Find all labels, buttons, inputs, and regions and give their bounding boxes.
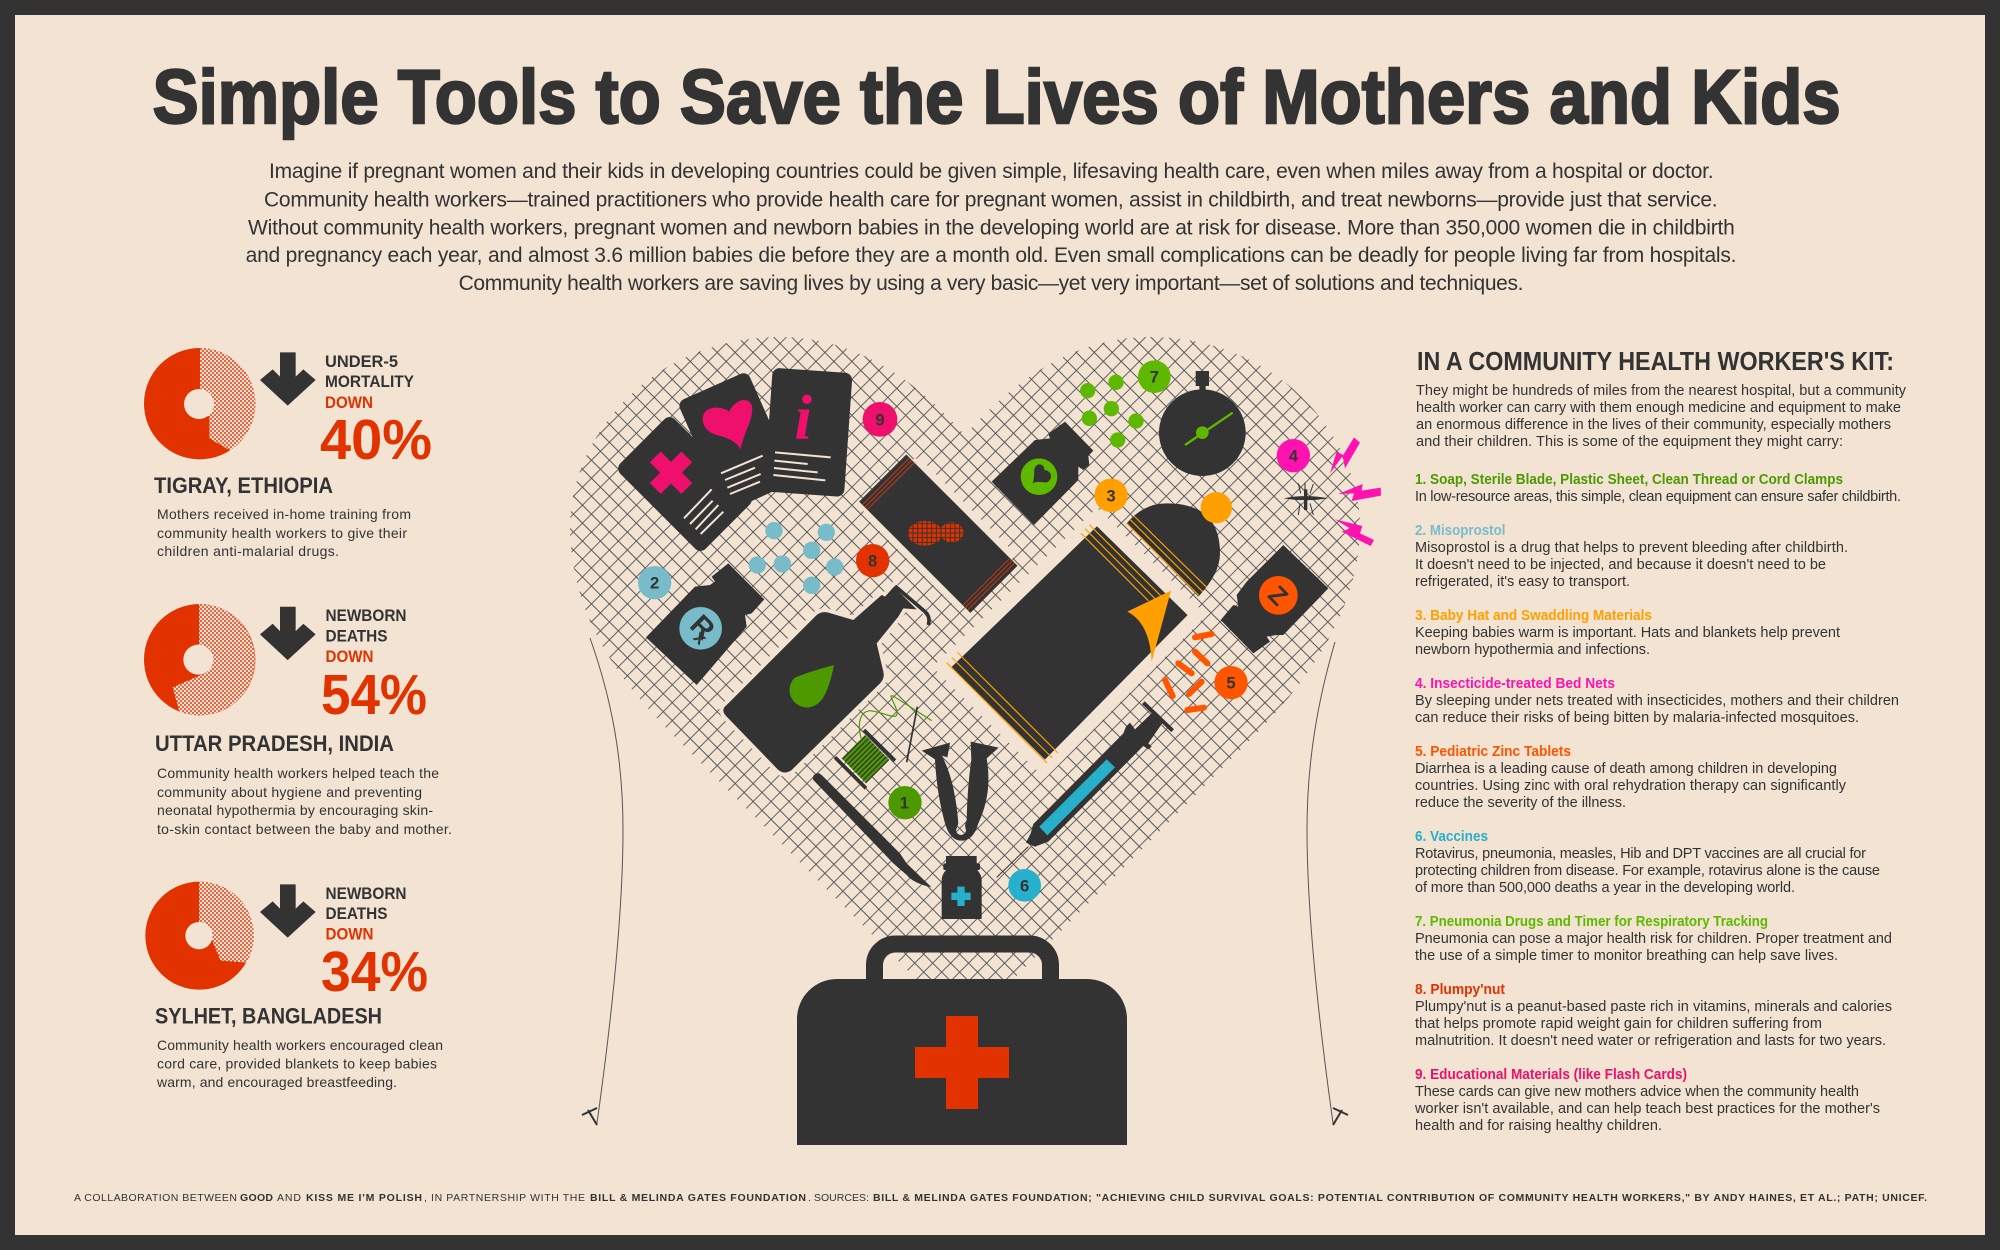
net strings — [582, 638, 1348, 1125]
stat label: DEATHS — [326, 627, 388, 646]
badge 6 — [1008, 869, 1041, 902]
item 9: worker isn't available, and can help teach best practices for the mother's — [1414, 1101, 1880, 1117]
timer — [1159, 371, 1246, 476]
bag handle — [874, 944, 1051, 985]
badge 4 — [1277, 439, 1310, 472]
stat label: DEATHS — [326, 904, 388, 923]
stat label: MORTALITY — [325, 372, 415, 391]
footer credits: GOOD — [240, 1192, 273, 1204]
item 5: countries. Using zinc with oral rehydration therapy can significantly — [1415, 778, 1847, 794]
footer credits: AND — [277, 1192, 301, 1204]
pneumonia pills — [1080, 375, 1144, 448]
percentage: 40% — [320, 408, 432, 472]
location heading: TIGRAY, ETHIOPIA — [154, 473, 333, 498]
description: community about hygiene and preventing — [157, 784, 422, 800]
item 2: It doesn't need to be injected, and because it doesn't need to be — [1415, 557, 1826, 573]
item 8: that helps promote rapid weight gain for children suffering from — [1415, 1016, 1822, 1032]
badge 3: 3 — [1106, 486, 1116, 505]
item 2 — [1415, 523, 1848, 590]
panel: Tigray statistic — [144, 348, 432, 559]
description — [156, 1037, 443, 1090]
item 9 — [1414, 1067, 1880, 1134]
soap bottle — [723, 586, 929, 772]
stat label: UNDER-5 — [325, 352, 398, 371]
item 8: 8. Plumpy'nut — [1415, 982, 1505, 998]
badge 2: 2 — [650, 574, 659, 593]
footer credits: , IN PARTNERSHIP WITH THE — [424, 1192, 585, 1204]
badge 7 — [1138, 360, 1171, 393]
intro text block: Community health workers—trained practitioners who provide health care for pregnant women, assist in childbirth, and treat newborns—provide just that service. — [264, 189, 1718, 212]
percentage: 34% — [321, 940, 428, 1004]
description: cord care, provided blankets to keep babies — [157, 1056, 437, 1072]
zinc bottle — [1221, 545, 1328, 653]
description: Mothers received in-home training from — [157, 506, 411, 522]
pie chart: 40% — [144, 348, 255, 459]
intro text block: Without community health workers, pregnant women and newborn babies in the developing world are at risk for disease. More than 350,000 women die in childbirth — [248, 217, 1735, 240]
intro text block: Community health workers are saving lives by using a very basic—yet very important—set of solutions and techniques. — [459, 272, 1524, 295]
badge 5: 5 — [1226, 674, 1236, 693]
location heading: UTTAR PRADESH, INDIA — [155, 731, 394, 756]
badge 4: 4 — [1289, 447, 1299, 466]
stat label — [326, 884, 406, 944]
pneumonia bottle — [992, 422, 1093, 525]
zinc bottle: Z — [1262, 581, 1293, 611]
item 7 — [1415, 914, 1892, 964]
kit intro — [1416, 383, 1907, 450]
item 3: Keeping babies warm is important. Hats and blankets help prevent — [1415, 625, 1840, 641]
kit intro: health worker can carry with them enough medicine and equipment to make — [1416, 400, 1901, 416]
bag body — [797, 979, 1127, 1145]
item 4: 4. Insecticide-treated Bed Nets — [1415, 676, 1615, 692]
footer credits: KISS ME I'M POLISH — [306, 1192, 422, 1204]
baby swaddling blanket — [942, 517, 1197, 769]
icon: lightning bolts — [1330, 437, 1381, 546]
flash cards — [615, 368, 853, 554]
item 6: Rotavirus, pneumonia, measles, Hib and DPT vaccines are all crucial for — [1415, 846, 1866, 862]
vaccine vial — [942, 856, 982, 919]
item 4: By sleeping under nets treated with insecticides, mothers and their children — [1415, 693, 1899, 709]
item 4 — [1415, 676, 1899, 726]
icon: down arrow — [260, 352, 316, 406]
badge 6: 6 — [1020, 876, 1029, 895]
footer credits: BILL & MELINDA GATES FOUNDATION — [590, 1192, 806, 1204]
zinc tablets — [1165, 634, 1212, 710]
item 7: 7. Pneumonia Drugs and Timer for Respiratory Tracking — [1415, 914, 1768, 930]
intro text block: Imagine if pregnant women and their kids in developing countries could be given simple, lifesaving health care, even when miles away from a hospital or doctor. — [269, 160, 1714, 183]
footer credits: BILL & MELINDA GATES FOUNDATION; "ACHIEVING CHILD SURVIVAL GOALS: POTENTIAL CONTRIBUTION OF COMMUNITY HEALTH WORKERS," BY ANDY HAINES, ET AL.; PATH; UNICEF. — [873, 1192, 1927, 1204]
item 4: can reduce their risks of being bitten by malaria-infected mosquitoes. — [1415, 710, 1859, 726]
pie chart: 34% — [145, 882, 254, 990]
item 6 — [1415, 829, 1880, 896]
intro text block — [246, 160, 1737, 295]
item 5 — [1415, 744, 1847, 811]
icon: down arrow — [260, 607, 316, 660]
badge 2 — [638, 566, 671, 599]
percentage: 54% — [321, 663, 427, 727]
badge 9: 9 — [875, 410, 885, 429]
sterile blade — [813, 773, 932, 887]
heart mesh net — [570, 337, 1360, 1028]
stat label: NEWBORN — [326, 606, 406, 625]
item 8: malnutrition. It doesn't need water or refrigeration and lasts for two years. — [1415, 1033, 1886, 1049]
description: Community health workers helped teach the — [157, 765, 439, 781]
red cross — [915, 1016, 1009, 1109]
item 1 — [1415, 472, 1901, 505]
item 9: health and for raising healthy children. — [1415, 1118, 1662, 1134]
kit heading: IN A COMMUNITY HEALTH WORKER'S KIT: — [1417, 346, 1894, 376]
item 9: These cards can give new mothers advice when the community health — [1415, 1084, 1859, 1100]
description — [157, 765, 452, 837]
pie chart: 54% — [144, 604, 255, 715]
item 6: 6. Vaccines — [1415, 829, 1488, 845]
item 6: protecting children from disease. For example, rotavirus alone is the cause — [1415, 863, 1880, 879]
item 2: Misoprostol is a drug that helps to prevent bleeding after childbirth. — [1415, 540, 1848, 556]
badge 1: 1 — [900, 794, 909, 813]
icon: mosquito — [1283, 483, 1328, 515]
plumpy'nut packet — [858, 453, 1019, 614]
item 3: newborn hypothermia and infections. — [1415, 642, 1650, 658]
badge 8: 8 — [868, 552, 877, 571]
icon: down arrow — [260, 884, 316, 938]
badge 8 — [856, 544, 889, 577]
item 8: Plumpy'nut is a peanut-based paste rich in vitamins, minerals and calories — [1415, 999, 1892, 1015]
panel: Uttar Pradesh statistic — [144, 604, 452, 837]
item 3 — [1415, 608, 1840, 658]
item 5: 5. Pediatric Zinc Tablets — [1415, 744, 1571, 760]
stat label: DOWN — [326, 925, 374, 944]
title: Simple Tools to Save the Lives of Mothers and Kids — [153, 55, 1841, 140]
stat label: DOWN — [325, 393, 373, 412]
item 2: refrigerated, it's easy to transport. — [1415, 574, 1630, 590]
badge 7: 7 — [1150, 368, 1159, 387]
kit intro: an enormous difference in the lives of their community, especially mothers — [1416, 417, 1891, 433]
stat label — [325, 352, 415, 412]
stat label: NEWBORN — [326, 884, 406, 903]
kit intro: They might be hundreds of miles from the nearest hospital, but a community — [1416, 383, 1907, 399]
item 9: 9. Educational Materials (like Flash Cards) — [1415, 1067, 1687, 1083]
kit intro: and their children. This is some of the equipment they might carry: — [1416, 434, 1843, 450]
stat label — [326, 606, 406, 666]
right kit items — [942, 360, 1381, 769]
item 6: of more than 500,000 deaths a year in the developing world. — [1415, 880, 1795, 896]
description: to-skin contact between the baby and mother. — [157, 821, 452, 837]
item 5: reduce the severity of the illness. — [1415, 795, 1626, 811]
item 7: the use of a simple timer to monitor breathing can help save lives. — [1415, 948, 1838, 964]
location heading: SYLHET, BANGLADESH — [155, 1004, 382, 1029]
flash cards: i — [794, 382, 812, 452]
description — [157, 506, 411, 559]
misoprostol bottle: R — [683, 609, 721, 646]
badge 5 — [1214, 666, 1248, 699]
intro text block: and pregnancy each year, and almost 3.6 million babies die before they are a month old. Even small complications can be deadly for people living far from hospitals. — [246, 244, 1737, 267]
cord clamp — [922, 742, 999, 841]
item 7: Pneumonia can pose a major health risk for children. Proper treatment and — [1415, 931, 1892, 947]
panel: Sylhet statistic — [145, 882, 443, 1090]
misoprostol bottle — [646, 563, 764, 685]
description: warm, and encouraged breastfeeding. — [156, 1074, 397, 1090]
medical kit bag — [797, 944, 1127, 1145]
stat label: DOWN — [326, 647, 374, 666]
thread spool — [835, 696, 932, 788]
badge 1 — [888, 786, 922, 819]
lower kit items — [813, 696, 1173, 919]
badge 3 — [1094, 479, 1128, 512]
misoprostol pills — [749, 522, 843, 594]
footer credits: . SOURCES: — [808, 1192, 869, 1204]
vaccine syringe — [997, 703, 1173, 877]
description: community health workers to give their — [157, 525, 407, 541]
footer credits: A COLLABORATION BETWEEN — [74, 1192, 237, 1204]
misoprostol bottle: x — [690, 626, 712, 649]
item 8 — [1415, 982, 1892, 1049]
item 1: In low-resource areas, this simple, clean equipment can ensure safer childbirth. — [1415, 489, 1901, 505]
item 1: 1. Soap, Sterile Blade, Plastic Sheet, Clean Thread or Cord Clamps — [1415, 472, 1843, 488]
panel: kit description — [1414, 346, 1907, 1134]
description: Community health workers encouraged clean — [157, 1037, 443, 1053]
item 2: 2. Misoprostol — [1415, 523, 1506, 539]
baby hat — [1127, 492, 1232, 597]
description: neonatal hypothermia by encouraging skin- — [157, 802, 433, 818]
footer credits — [74, 1192, 1927, 1204]
left kit items — [615, 368, 1019, 772]
item 5: Diarrhea is a leading cause of death among children in developing — [1415, 761, 1837, 777]
badge 9 — [863, 402, 897, 437]
item 3: 3. Baby Hat and Swaddling Materials — [1415, 608, 1652, 624]
description: children anti-malarial drugs. — [157, 543, 339, 559]
